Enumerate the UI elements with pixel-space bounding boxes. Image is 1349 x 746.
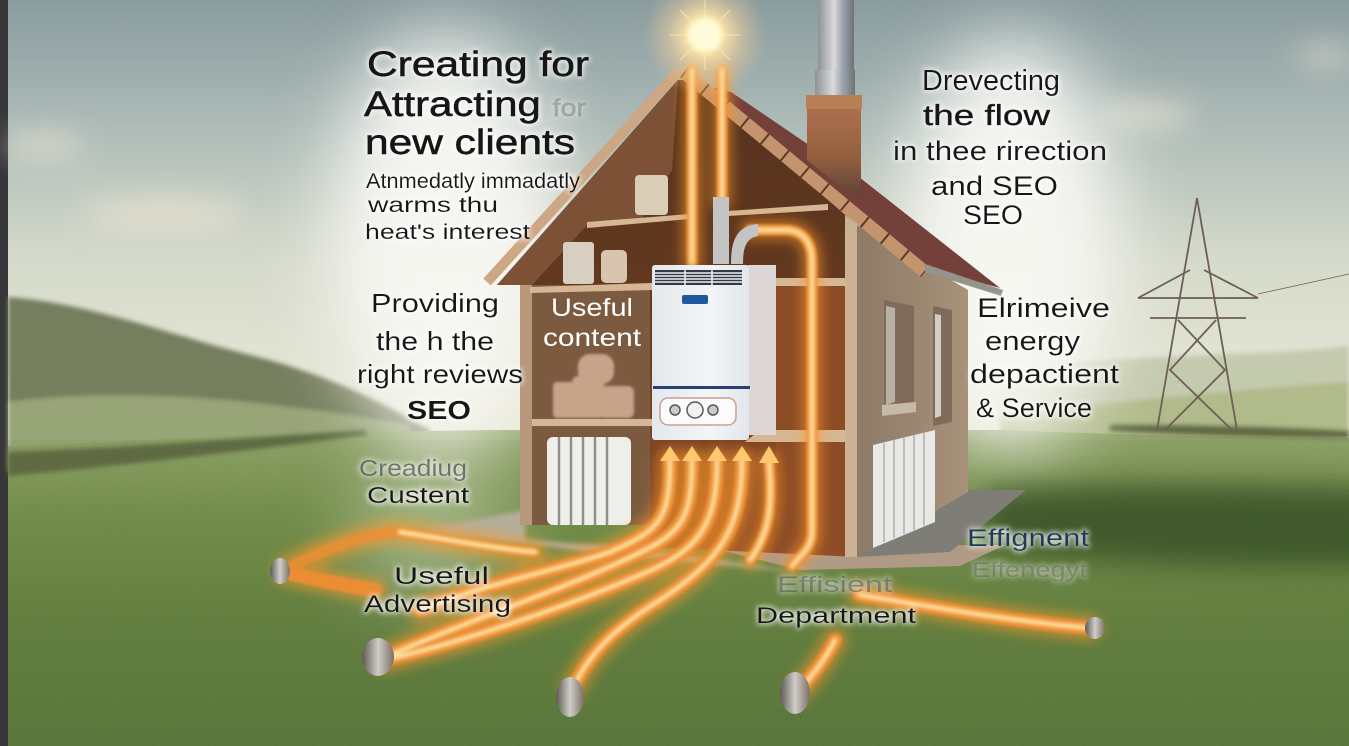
text: effective energy department: & Service	[976, 393, 1092, 423]
text: directing the flow: SEO	[963, 200, 1023, 230]
background sky	[8, 0, 1349, 470]
text: useful content	[543, 294, 641, 352]
grass field	[8, 430, 1349, 746]
text: providing right reviews SEO	[357, 288, 523, 425]
text: creating custent	[359, 455, 470, 508]
text: warms interest: warms thu	[367, 194, 498, 217]
text: warms interest: heat's interest	[365, 221, 530, 244]
boiler dials	[670, 402, 718, 418]
electricity pylon	[1138, 198, 1349, 430]
concrete slabs	[420, 490, 1026, 572]
text: warms interest: Atnmedatly immadatly	[366, 170, 581, 193]
tree lines	[8, 425, 1349, 476]
clouds	[5, 47, 1349, 233]
text: useful advertising: Useful	[394, 563, 489, 590]
text: creating custent: Creadiug	[359, 455, 467, 481]
side radiator	[873, 430, 935, 548]
text: useful advertising: Advertising	[364, 591, 511, 618]
text: effective energy department: Elrimeive	[977, 293, 1110, 323]
windows on side wall	[882, 300, 952, 426]
heading: creating for attracting new clients	[364, 45, 589, 162]
text: providing right reviews SEO: the h the	[376, 326, 494, 356]
heading: creating for attracting new clients: Attracting for	[364, 85, 586, 124]
text: creating custent: Custent	[367, 482, 470, 508]
glowing pipes	[285, 70, 1090, 690]
text: providing right reviews SEO: SEO	[407, 395, 471, 425]
text: efficient department: Effisient	[777, 572, 892, 597]
sun flare	[643, 0, 767, 97]
roof gutter	[925, 264, 1003, 296]
heading: creating for attracting new clients: Creating for	[367, 45, 589, 84]
text: directing the flow	[893, 65, 1107, 230]
text: directing the flow: Drevecting	[922, 65, 1060, 97]
text: efficient energy: Effignent	[967, 525, 1089, 552]
pipes glow	[285, 70, 1090, 690]
pipes core	[285, 70, 1090, 690]
grass texture	[8, 440, 1349, 746]
interior radiator	[547, 437, 631, 525]
text: useful content: Useful	[551, 294, 633, 322]
text: directing the flow: the flow	[923, 100, 1051, 132]
shelves	[530, 204, 845, 442]
text: useful advertising	[364, 563, 511, 618]
white glow behind text columns	[330, 35, 1120, 600]
flue pipes to boiler	[713, 197, 758, 264]
text: providing right reviews SEO: right reviews	[357, 359, 523, 389]
text: effective energy department: energy	[985, 326, 1081, 356]
text: efficient energy	[967, 525, 1089, 582]
roof	[487, 72, 1000, 288]
heading: creating for attracting new clients: new clients	[365, 123, 575, 162]
text: useful content: content	[543, 324, 641, 352]
jars on shelves	[553, 175, 668, 418]
pipe connectors under boiler	[660, 446, 779, 463]
house shadow on grass	[985, 484, 1349, 567]
text: effective energy department	[970, 293, 1120, 423]
boiler unit	[652, 265, 776, 440]
text: effective energy department: depactient	[970, 359, 1120, 389]
pipes highlight	[385, 70, 1090, 690]
boiler logo	[682, 295, 708, 304]
pipe metal ends	[270, 558, 1105, 717]
text: providing right reviews SEO: Providing	[371, 288, 499, 318]
text: directing the flow: in thee rirection	[893, 136, 1107, 166]
distant hills	[8, 297, 1349, 470]
chimney flue	[815, 0, 855, 96]
text: efficient energy: Effenegyt	[972, 559, 1087, 582]
text: directing the flow: and SEO	[931, 171, 1058, 201]
text: warms interest	[365, 170, 581, 244]
chimney	[806, 95, 862, 196]
text: efficient department	[756, 572, 916, 628]
text: efficient department: Department	[756, 603, 916, 628]
house walls and interior	[497, 80, 968, 557]
